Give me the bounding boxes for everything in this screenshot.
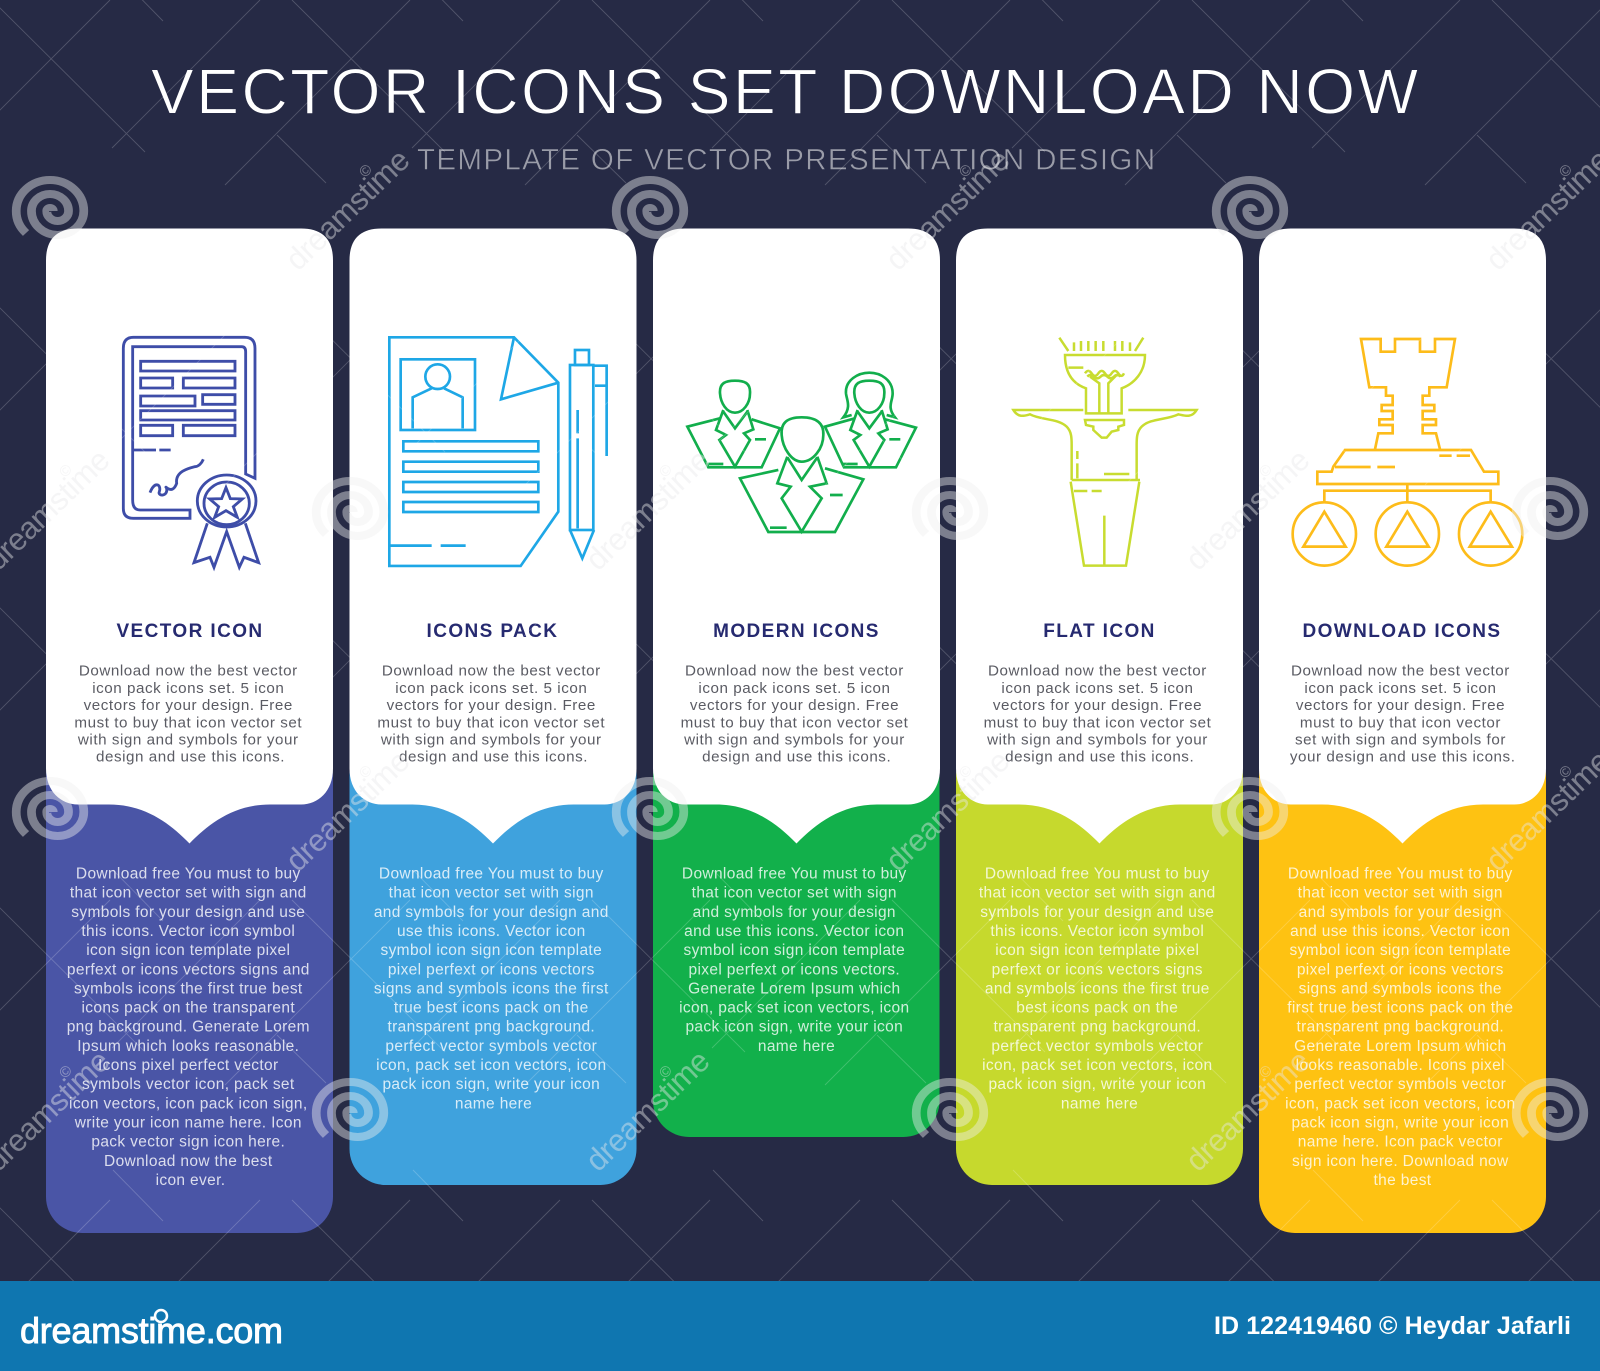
watermark text bbox=[0, 138, 1600, 1178]
detail text: and symbols icons the first true bbox=[985, 980, 1210, 997]
description: must to buy that icon vector bbox=[1300, 714, 1501, 731]
card 1 white top bbox=[46, 228, 333, 844]
description: with sign and symbols for your bbox=[380, 732, 602, 748]
detail text: Generate Lorem Ipsum which bbox=[1294, 1038, 1506, 1055]
panel: card 1 vector icon bbox=[46, 228, 333, 1233]
detail text: name here. Icon pack vector bbox=[1298, 1134, 1503, 1151]
footer credit: ID 122419460 © Heydar Jafarli bbox=[1214, 1312, 1571, 1340]
detail text: Download free You must to buy bbox=[379, 866, 604, 882]
detail text: this icons. Vector icon symbol bbox=[990, 923, 1204, 940]
detail text: symbols icons the first true best bbox=[74, 980, 303, 997]
detail text: true best icons pack on the bbox=[394, 1000, 589, 1017]
icon: certificate with medal bbox=[123, 337, 259, 567]
detail text: and use this icons. Vector icon bbox=[1290, 923, 1510, 940]
card 3 white top bbox=[653, 228, 940, 844]
description: design and use this icons. bbox=[96, 749, 285, 766]
detail text: looks reasonable. Icons pixel bbox=[1296, 1057, 1505, 1074]
description: icon pack icons set. 5 icon bbox=[395, 680, 587, 697]
detail text: signs and symbols icons the bbox=[1299, 980, 1502, 997]
detail text: use this icons. Vector icon bbox=[397, 923, 586, 940]
watermark spirals bbox=[16, 180, 1584, 1137]
icon: three business people bbox=[687, 373, 916, 532]
description: vectors for your design. Free bbox=[1296, 697, 1505, 714]
icon: resume document and pen bbox=[389, 337, 607, 566]
detail text: symbol icon sign icon template bbox=[683, 942, 905, 959]
detail text: icon, pack set icon vectors, icon bbox=[376, 1057, 606, 1074]
description: with sign and symbols for your bbox=[77, 732, 299, 748]
detail text: signs and symbols icons the first bbox=[374, 980, 609, 997]
description: your design and use this icons. bbox=[1290, 749, 1515, 766]
detail text: write your icon name here. Icon bbox=[74, 1114, 302, 1132]
detail text: pack vector sign icon here. bbox=[91, 1134, 285, 1151]
detail text: icon sign icon template pixel bbox=[86, 942, 290, 959]
detail text: perfect vector symbols vector bbox=[385, 1038, 597, 1055]
detail text: Download free You must to buy bbox=[682, 866, 907, 882]
description: icon pack icons set. 5 icon bbox=[1304, 680, 1497, 697]
detail text: pixel perfext or icons vectors. bbox=[688, 961, 900, 978]
description: must to buy that icon vector set bbox=[681, 714, 909, 731]
description: with sign and symbols for your bbox=[683, 732, 905, 748]
icon: logo spiral bbox=[155, 1310, 167, 1322]
description: Download now the best vector bbox=[685, 663, 904, 680]
detail text: pack icon sign, write your icon bbox=[685, 1019, 903, 1036]
detail text: transparent png background. bbox=[387, 1019, 595, 1036]
detail text: that icon vector set with sign and bbox=[70, 885, 307, 902]
detail text: icon vectors, icon pack icon sign, bbox=[69, 1095, 308, 1112]
detail text: icon, pack set icon vectors, icon bbox=[982, 1057, 1212, 1074]
description: Download now the best vector bbox=[1291, 663, 1510, 680]
card 3 coloured base bbox=[653, 740, 940, 1137]
description: design and use this icons. bbox=[702, 749, 891, 766]
detail text: symbol icon sign icon template bbox=[1289, 942, 1511, 959]
detail text: Generate Lorem Ipsum which bbox=[688, 980, 900, 997]
detail text: that icon vector set with sign and bbox=[979, 885, 1216, 902]
panel: card 3 modern icons bbox=[653, 228, 940, 1137]
detail text: first true best icons pack on the bbox=[1287, 1000, 1513, 1017]
description: must to buy that icon vector set bbox=[984, 714, 1212, 731]
icon: figure with light bulb head bbox=[1013, 338, 1197, 566]
card 2 coloured base bbox=[350, 740, 636, 1185]
detail text: transparent png background. bbox=[993, 1019, 1201, 1036]
detail text: perfext or icons vectors signs bbox=[992, 961, 1203, 978]
detail text: Download free You must to buy bbox=[76, 866, 301, 882]
description: Download now the best vector bbox=[382, 663, 601, 680]
detail text: and symbols for your design and bbox=[374, 904, 609, 921]
detail text: symbols for your design and use bbox=[71, 904, 305, 921]
detail text: icons pack on the transparent bbox=[82, 1000, 295, 1017]
detail text: name here bbox=[758, 1038, 835, 1055]
detail text: icon sign icon template pixel bbox=[995, 942, 1199, 959]
heading: DOWNLOAD ICONS bbox=[1302, 621, 1502, 642]
description: vectors for your design. Free bbox=[690, 697, 899, 714]
detail text: pack icon sign, write your icon bbox=[1291, 1114, 1509, 1132]
description: with sign and symbols for your bbox=[986, 732, 1208, 748]
description: icon pack icons set. 5 icon bbox=[1001, 680, 1194, 697]
detail text: that icon vector set with sign bbox=[692, 885, 897, 902]
detail text: and symbols for your design bbox=[693, 904, 896, 921]
detail text: Download free You must to buy bbox=[985, 866, 1210, 882]
subtitle: TEMPLATE OF VECTOR PRESENTATION DESIGN bbox=[417, 143, 1155, 176]
detail text: Download now the best bbox=[104, 1153, 273, 1170]
footer logo: dreamstime.com bbox=[20, 1310, 283, 1351]
detail text: name here bbox=[1061, 1095, 1138, 1112]
card 4 coloured base bbox=[956, 740, 1243, 1185]
title: VECTOR ICONS SET DOWNLOAD NOW bbox=[151, 56, 1419, 128]
description: must to buy that icon vector set bbox=[74, 714, 302, 731]
description: design and use this icons. bbox=[399, 749, 588, 766]
detail text: best icons pack on the bbox=[1016, 1000, 1178, 1017]
detail text: pixel perfext or icons vectors bbox=[1297, 961, 1504, 978]
icon: chess rook strategy tree bbox=[1293, 339, 1522, 566]
detail text: and use this icons. Vector icon bbox=[684, 923, 904, 940]
detail text: pack icon sign, write your icon bbox=[382, 1076, 600, 1093]
detail text: that icon vector set with sign bbox=[389, 885, 594, 902]
description: vectors for your design. Free bbox=[993, 697, 1202, 714]
detail text: this icons. Vector icon symbol bbox=[81, 923, 295, 940]
detail text: perfext or icons vectors signs and bbox=[67, 961, 310, 978]
detail text: symbols vector icon, pack set bbox=[82, 1076, 295, 1093]
panel: card 5 download icons bbox=[1259, 228, 1546, 1233]
description: vectors for your design. Free bbox=[387, 697, 596, 714]
detail text: perfect vector symbols vector bbox=[991, 1038, 1203, 1055]
footer bar bbox=[0, 1281, 1600, 1371]
detail text: sign icon here. Download now bbox=[1292, 1153, 1509, 1170]
panel: card 4 flat icon bbox=[956, 228, 1243, 1185]
detail text: transparent png background. bbox=[1296, 1019, 1504, 1036]
detail text: icon, pack set icon vectors, icon bbox=[679, 1000, 909, 1017]
description: design and use this icons. bbox=[1005, 749, 1194, 766]
detail text: pack icon sign, write your icon bbox=[988, 1076, 1206, 1093]
description: Download now the best vector bbox=[79, 663, 298, 680]
detail text: name here bbox=[455, 1095, 532, 1112]
panel: card 2 icons pack bbox=[350, 228, 636, 1185]
detail text: symbols for your design and use bbox=[980, 904, 1214, 921]
description: Download now the best vector bbox=[988, 663, 1207, 680]
description: vectors for your design. Free bbox=[84, 697, 293, 714]
detail text: Download free You must to buy bbox=[1288, 866, 1513, 882]
detail text: icon, pack set icon vectors, icon bbox=[1285, 1095, 1515, 1112]
card 5 coloured base bbox=[1259, 740, 1546, 1233]
description: icon pack icons set. 5 icon bbox=[698, 680, 891, 697]
heading: VECTOR ICON bbox=[116, 621, 264, 642]
detail text: Icons pixel perfect vector bbox=[98, 1057, 279, 1074]
description: must to buy that icon vector set bbox=[377, 714, 605, 731]
heading: MODERN ICONS bbox=[713, 621, 880, 642]
heading: FLAT ICON bbox=[1043, 621, 1156, 642]
detail text: pixel perfext or icons vectors bbox=[388, 961, 595, 978]
detail text: the best bbox=[1374, 1172, 1432, 1189]
detail text: that icon vector set with sign bbox=[1298, 885, 1503, 902]
card 5 white top bbox=[1259, 228, 1546, 844]
description: icon pack icons set. 5 icon bbox=[92, 680, 284, 697]
detail text: symbol icon sign icon template bbox=[380, 942, 602, 959]
heading: ICONS PACK bbox=[427, 621, 558, 642]
detail text: png background. Generate Lorem bbox=[67, 1019, 310, 1036]
description: set with sign and symbols for bbox=[1295, 732, 1506, 748]
detail text: and symbols for your design bbox=[1299, 904, 1502, 921]
detail text: icon ever. bbox=[156, 1172, 225, 1189]
card 1 coloured base bbox=[46, 740, 333, 1233]
card 2 white top bbox=[350, 228, 636, 844]
detail text: perfect vector symbols vector bbox=[1294, 1076, 1506, 1093]
card 4 white top bbox=[956, 228, 1243, 844]
detail text: Ipsum which looks reasonable. bbox=[77, 1038, 299, 1055]
